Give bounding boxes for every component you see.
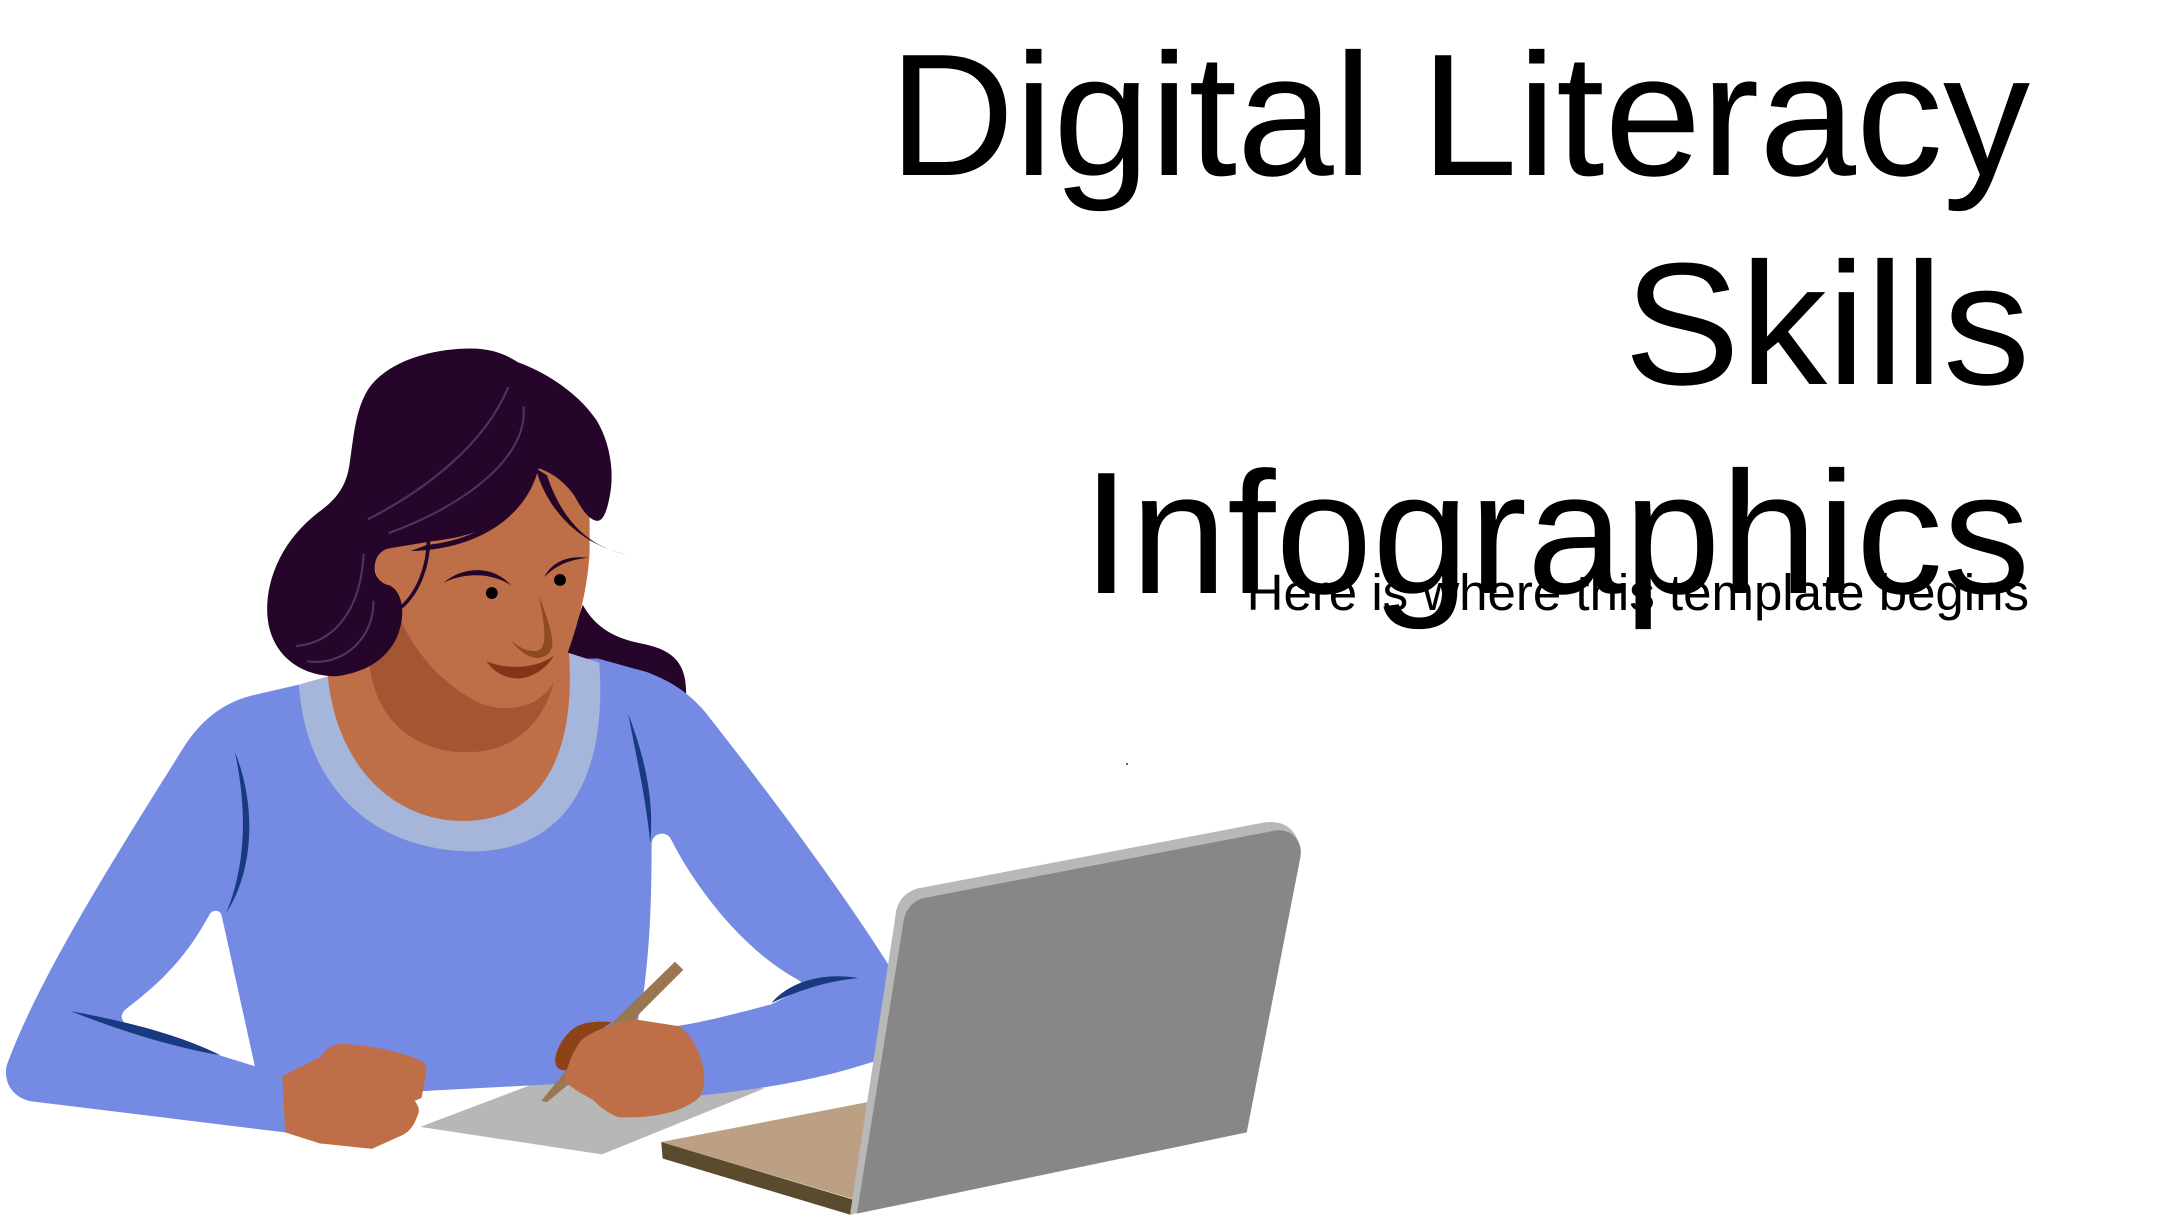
right hand <box>565 1019 704 1117</box>
hair highlights <box>296 387 524 662</box>
white gap: left arm <box>122 911 255 1066</box>
hair strand: by ear <box>401 540 428 608</box>
mouth <box>486 656 554 678</box>
sleeve fold: centre <box>628 714 651 843</box>
hair <box>267 349 612 676</box>
pen <box>541 962 683 1102</box>
ear <box>374 548 413 606</box>
left hand fist <box>282 1044 426 1149</box>
white gap: right arm <box>636 834 803 1026</box>
laptop base side <box>661 1142 854 1215</box>
hair back <box>565 605 686 696</box>
sweater <box>6 658 909 1132</box>
eyes <box>486 574 566 599</box>
laptop lid edge <box>850 822 1300 1215</box>
sleeve fold: left forearm <box>70 1011 220 1055</box>
collar <box>299 653 600 851</box>
illustration: woman writing at laptop <box>6 349 1301 1215</box>
laptop base top <box>661 1099 882 1201</box>
eyebrows <box>444 557 588 585</box>
hair strand: left fringe <box>411 467 539 551</box>
laptop lid back <box>857 830 1301 1214</box>
title <box>889 17 2030 630</box>
sleeve fold: right forearm <box>771 976 858 1003</box>
sleeve fold: upper left <box>226 752 249 913</box>
neck and chest <box>328 606 570 821</box>
title: Skills <box>1624 226 2030 421</box>
red speck <box>1126 763 1128 765</box>
right hand thumb <box>555 1022 612 1070</box>
neck shadow <box>369 610 554 752</box>
hair strand: right fringe <box>536 468 628 554</box>
subtitle: Here is where this template begins <box>1247 564 2029 621</box>
face <box>375 455 590 707</box>
paper <box>420 1077 765 1154</box>
title: Digital Literacy <box>889 17 2030 212</box>
nose <box>511 595 552 658</box>
title: Infographics <box>1082 435 2030 630</box>
